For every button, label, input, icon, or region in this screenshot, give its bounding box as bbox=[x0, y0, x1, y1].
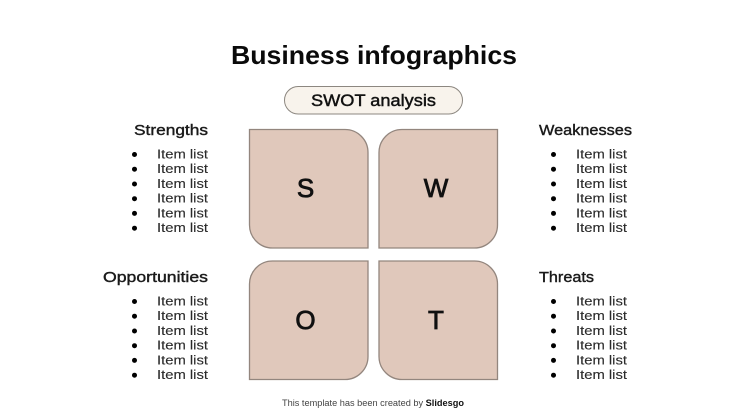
list: opportunities: Item list bbox=[157, 308, 208, 323]
quadrant: O: O bbox=[295, 305, 316, 335]
panel: weaknesses bbox=[539, 122, 632, 235]
panel: opportunities bbox=[103, 269, 208, 382]
heading: weaknesses: Weaknesses bbox=[539, 122, 632, 139]
list: strengths bbox=[132, 146, 208, 235]
list: weaknesses: Item list bbox=[576, 161, 627, 176]
list: threats: Item list bbox=[576, 367, 627, 382]
list: threats: Item list bbox=[576, 338, 627, 353]
subtitle pill bbox=[284, 86, 462, 114]
list: strengths: Item list bbox=[157, 205, 208, 220]
list: weaknesses: Item list bbox=[576, 205, 627, 220]
list: opportunities: Item list bbox=[157, 338, 208, 353]
panel: threats bbox=[539, 269, 627, 382]
footer credit: This template has been created by Slidesgo bbox=[282, 398, 465, 408]
list: opportunities: Item list bbox=[157, 323, 208, 338]
list: threats: Item list bbox=[576, 294, 627, 308]
quadrant: T: T bbox=[428, 305, 444, 335]
title: Business infographics bbox=[231, 40, 517, 70]
list: threats: Item list bbox=[576, 352, 627, 367]
list: opportunities bbox=[132, 294, 208, 382]
quadrant: W: W bbox=[424, 173, 449, 203]
quadrant: T bbox=[379, 261, 498, 380]
heading: strengths: Strengths bbox=[134, 122, 208, 139]
list: strengths: Item list bbox=[157, 220, 208, 235]
quadrant: S bbox=[250, 130, 368, 248]
quadrant: W bbox=[379, 130, 498, 248]
list: opportunities: Item list bbox=[157, 367, 208, 382]
heading: opportunities: Opportunities bbox=[103, 269, 208, 286]
list: strengths: Item list bbox=[157, 176, 208, 191]
heading: threats: Threats bbox=[539, 269, 594, 286]
list: weaknesses: Item list bbox=[576, 146, 627, 162]
list: weaknesses: Item list bbox=[576, 220, 627, 235]
list: threats bbox=[551, 294, 627, 382]
list: strengths: Item list bbox=[157, 161, 208, 176]
subtitle pill: SWOT analysis bbox=[311, 91, 436, 110]
list: threats: Item list bbox=[576, 308, 627, 323]
list: strengths: Item list bbox=[157, 146, 208, 162]
list: weaknesses bbox=[551, 146, 627, 235]
list: threats: Item list bbox=[576, 323, 627, 338]
list: opportunities: Item list bbox=[157, 294, 208, 308]
list: weaknesses: Item list bbox=[576, 191, 627, 206]
panel: strengths bbox=[132, 122, 208, 235]
list: opportunities: Item list bbox=[157, 352, 208, 367]
list: strengths: Item list bbox=[157, 191, 208, 206]
quadrant: S: S bbox=[297, 173, 314, 203]
quadrant: O bbox=[250, 261, 368, 380]
list: weaknesses: Item list bbox=[576, 176, 627, 191]
